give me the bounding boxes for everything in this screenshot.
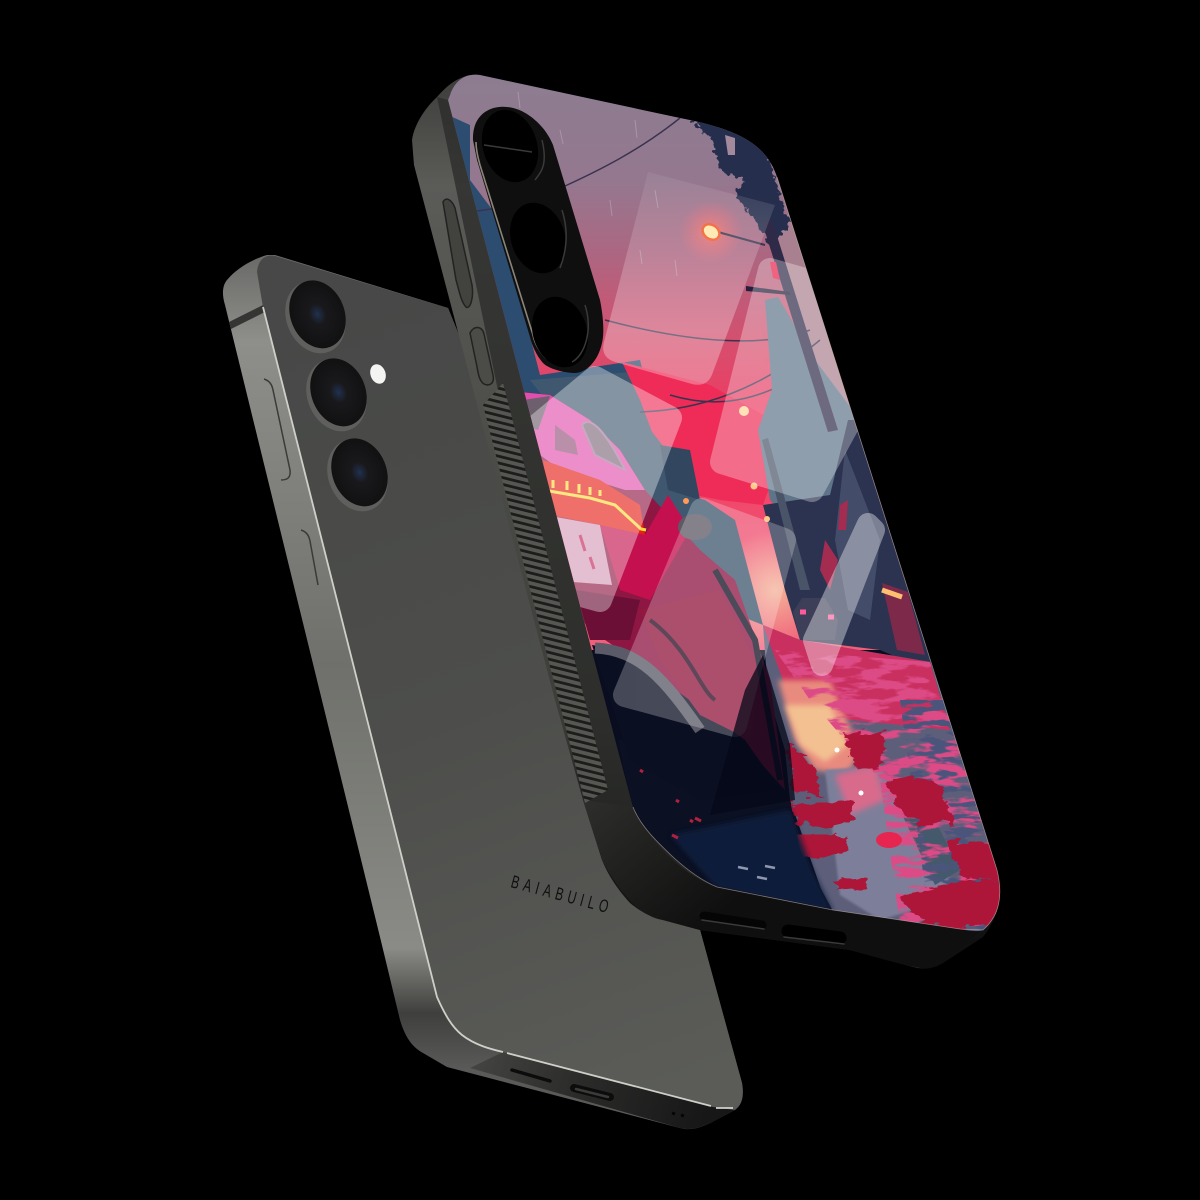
fender crease [650,620,715,700]
left road splashes [785,740,822,800]
lens 2 [296,350,378,440]
bottom cutouts [702,916,844,944]
camera hole 1 [473,102,547,190]
night base [448,75,936,872]
glass artwork [448,74,1000,932]
lane dashes [738,866,775,879]
pale upper right sky [778,214,850,406]
island rim [476,142,546,358]
neon tail light [549,480,646,530]
panel narrow [814,524,874,665]
license plate [556,517,612,585]
lower corner shade [583,800,983,968]
ribbed grip [483,383,608,803]
sparkle 2 [858,790,864,796]
camera hole 2 [501,195,575,281]
pink road haze [763,625,950,730]
wing mirror [678,514,712,540]
panel bottom [625,510,784,725]
ground shadow [618,700,835,915]
red road flecks [630,740,701,838]
lens 3 [317,430,399,520]
pale gap in tree [725,135,735,155]
back panel [257,256,743,1108]
magenta bumper [600,495,690,600]
inner dark band [437,97,983,968]
translucent logo panels [490,172,910,725]
camera island [473,102,603,375]
dark bumper [576,590,640,640]
glass edge shine [633,177,1000,930]
peach reflection [778,680,860,775]
car on far road [793,598,838,640]
lamp 5 [683,498,689,504]
bright reflection [785,705,848,762]
port cutout [788,931,840,938]
utility pole [762,220,838,432]
side buttons [264,379,318,585]
wet road [763,625,1010,940]
frame bottom edge [470,1052,735,1129]
dark triangle [710,655,795,815]
road sparkles [834,748,864,796]
upper road splashes [845,730,885,770]
camera hole 3 [523,289,597,375]
pink haze [835,765,885,815]
lamp 2 [739,406,749,416]
rain streaks [518,92,677,276]
lower-right dark buildings [763,420,934,674]
tail light band [543,460,645,535]
side window [582,422,625,470]
hole ring highlights [484,140,588,362]
red band [622,362,768,505]
fender trim [595,648,700,730]
flash [368,362,388,386]
far tail lights [800,612,834,617]
panel left [490,378,670,600]
brand wordmark: BAIABUILO [509,872,611,917]
wheel arch [592,645,780,800]
shop sign [882,590,902,597]
case shell [412,75,1000,969]
roof shade [555,425,578,455]
power button [470,327,493,385]
peach horizon [742,537,799,640]
illustration: two floating phones on black [222,74,1000,1130]
edge highlight [263,307,733,1108]
left buildings [448,115,660,440]
phone: case with glass back [412,60,1020,969]
near dark building [660,445,700,500]
road mottling [775,650,1010,940]
car body shell [521,392,785,790]
red splashes [785,730,1005,930]
cross arm [746,286,790,295]
sky [448,74,928,650]
camera lenses [275,272,399,520]
plate spots [580,535,594,569]
navy road texture [670,810,833,912]
panel right upper [722,270,910,490]
rear window [523,396,550,430]
red puddle [876,832,902,848]
phone frame [223,255,743,1129]
distant buildings [530,372,763,625]
panel top [603,172,775,385]
tree foliage [690,118,790,245]
street lamps [679,200,770,522]
port details [512,1070,684,1116]
road blue stripe [902,813,960,885]
volume button [443,199,473,307]
lamp 3 [750,482,758,490]
lamp 1 [700,221,722,243]
roof [520,392,645,490]
lamp 1 glow [679,200,743,264]
island body [473,107,603,373]
red pole glint [770,262,780,280]
side stripe [715,570,780,780]
lens 1 [275,272,357,362]
neon shop [882,583,925,655]
lamp 4 [764,516,770,522]
speaker cutout [704,916,762,925]
red rear fender [640,590,760,740]
second pole [762,438,810,590]
antenna band [229,305,265,329]
mic holes [672,1113,684,1116]
speaker slot [512,1070,550,1081]
sparkle 1 [834,748,840,752]
phone: grey back phone [223,255,743,1129]
grey stream [825,765,950,920]
car [520,392,785,800]
overhead wires [470,118,820,412]
red building accents [820,500,848,590]
lower road splashes [945,840,1005,880]
navy mottling [900,700,993,930]
lamp arm [718,232,765,245]
usb port [574,1088,610,1097]
haze buildings right [758,297,854,504]
building facade [835,450,880,620]
